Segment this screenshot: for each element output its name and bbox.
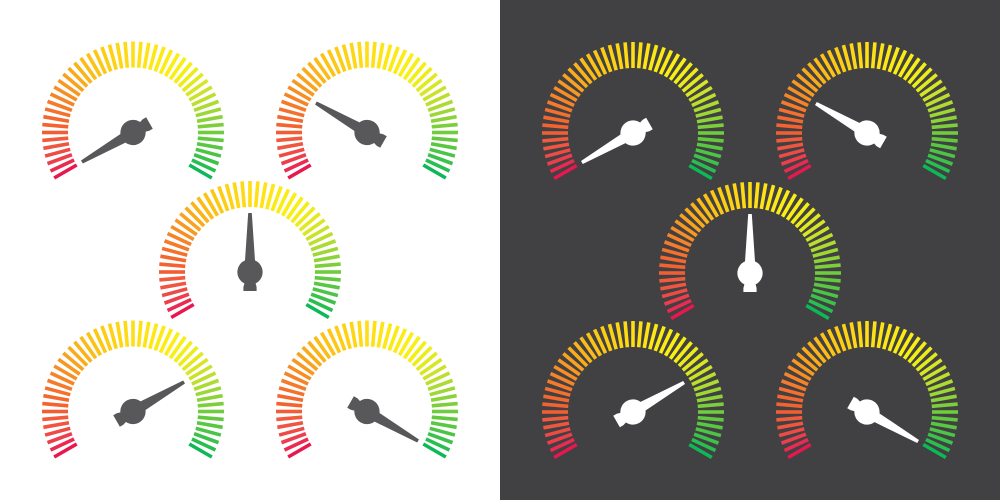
gauge: light top right, mid-low reading: [276, 42, 458, 180]
gauge: light centre, middle reading: [159, 181, 341, 319]
gauge: dark bottom right, high reading: [776, 321, 958, 459]
gauge: dark top right, mid-low reading: [776, 42, 958, 180]
gauge: dark bottom left, mid-high reading: [542, 321, 724, 459]
gauge: dark centre, middle reading: [659, 182, 841, 320]
panel: light background: [0, 0, 500, 500]
gauge: light top left, low reading: [42, 42, 224, 180]
gauge: light bottom left, mid-high reading: [42, 320, 224, 459]
panel: dark background: [500, 0, 1000, 500]
gauge: light bottom right, high reading: [276, 320, 458, 459]
gauge: dark top left, low reading: [542, 42, 724, 180]
